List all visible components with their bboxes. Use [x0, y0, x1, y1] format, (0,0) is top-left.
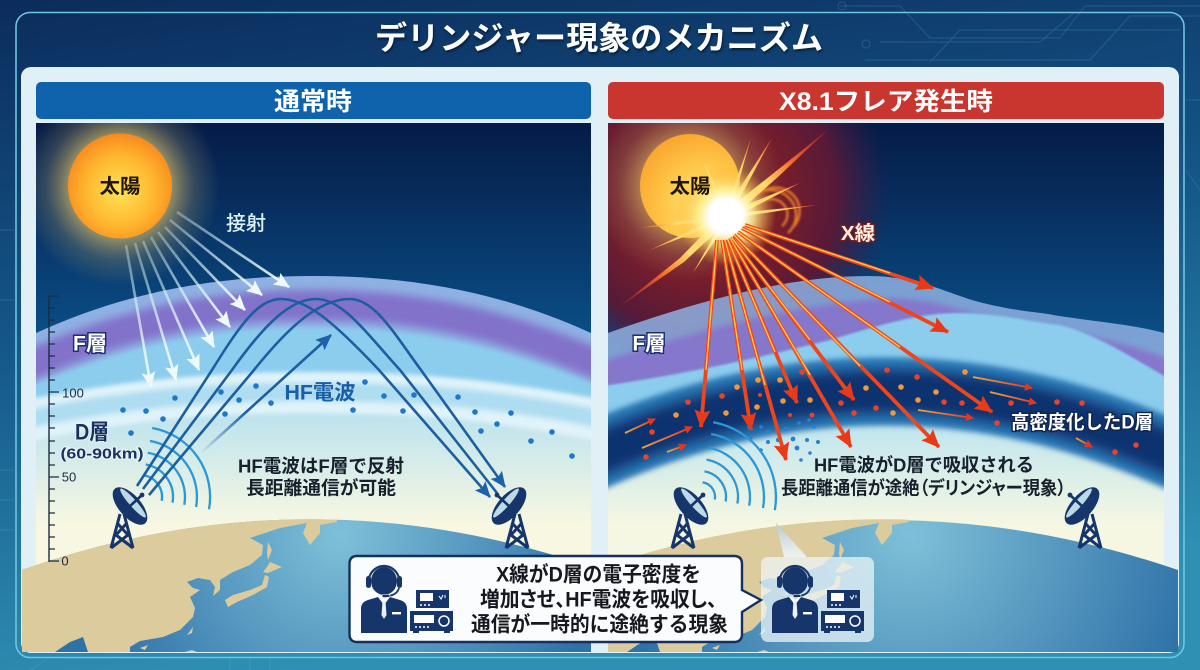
D layer charged particles [643, 367, 1139, 462]
header: normal: 通常時 [274, 88, 352, 116]
panel: normal conditions [0, 82, 630, 652]
text: normal explanation [238, 456, 404, 498]
icon: operator with radio [772, 566, 864, 633]
panel: X8.1 flare [590, 82, 1180, 652]
text: normal explanation: 長距離通信が可能 [246, 478, 396, 498]
atmosphere scene [36, 123, 591, 565]
altitude scale: 0 [61, 554, 69, 568]
radio arcs absorbed [703, 422, 776, 510]
D layer electrons [120, 379, 575, 459]
icon: right antenna [486, 481, 532, 548]
X-ray arrows [701, 225, 992, 460]
label: F layer: F層 [73, 332, 107, 356]
speech bubble [350, 556, 761, 642]
altitude scale: 100 [62, 386, 84, 400]
header: flare: X8.1フレア発生時 [779, 88, 993, 116]
header: flare [608, 82, 1164, 119]
earth [22, 519, 591, 652]
label: HF wave: HF電波 [284, 382, 356, 404]
label: densified D layer: 高密度化したD層 [1011, 412, 1153, 434]
HF wave paths [137, 299, 505, 497]
callout text: X線がD層の電子密度を [496, 562, 701, 586]
card [761, 557, 874, 642]
atmosphere scene [608, 123, 1164, 566]
label: F layer: F層 [632, 332, 666, 356]
operator card with pointer [761, 523, 874, 642]
callout [350, 556, 761, 642]
radio emission arcs [144, 428, 210, 509]
sun with flare [608, 123, 830, 306]
flare spikes [619, 128, 830, 307]
sun: 太陽 [100, 175, 140, 198]
altitude scale: 50 [62, 470, 76, 484]
label: D layer: D層 [75, 420, 109, 444]
solar rays [126, 212, 289, 387]
icon: right antenna [1059, 481, 1105, 548]
text: flare explanation: 長距離通信が途絶（デリンジャー現象） [781, 478, 1066, 498]
callout text [471, 562, 728, 636]
icon: operator with radio [361, 566, 453, 633]
label: D layer altitude: (60-90km) [60, 446, 144, 462]
flare swirl [752, 188, 800, 233]
sun with flare: 太陽 [670, 175, 710, 198]
earth [594, 519, 1178, 652]
callout text: 増加させ、HF電波を吸収し、 [480, 588, 717, 612]
callout text: 通信が一時的に途絶する現象 [471, 612, 728, 636]
pointer to antenna signal [776, 523, 807, 557]
sun [36, 123, 216, 282]
label: grazing incidence: 接射 [226, 212, 266, 235]
header: normal [36, 82, 591, 119]
altitude scale [49, 296, 84, 568]
title: デリンジャー現象のメカニズム [375, 20, 823, 56]
text: flare explanation [781, 454, 1066, 498]
scattered mini arrows [625, 377, 1092, 452]
text: flare explanation: HF電波がD層で吸収される [814, 454, 1034, 476]
icon: left antenna [668, 481, 714, 548]
label: X-ray: X線 [841, 222, 875, 245]
text: normal explanation: HF電波はF層で反射 [238, 456, 404, 476]
icon: left antenna [107, 481, 153, 548]
